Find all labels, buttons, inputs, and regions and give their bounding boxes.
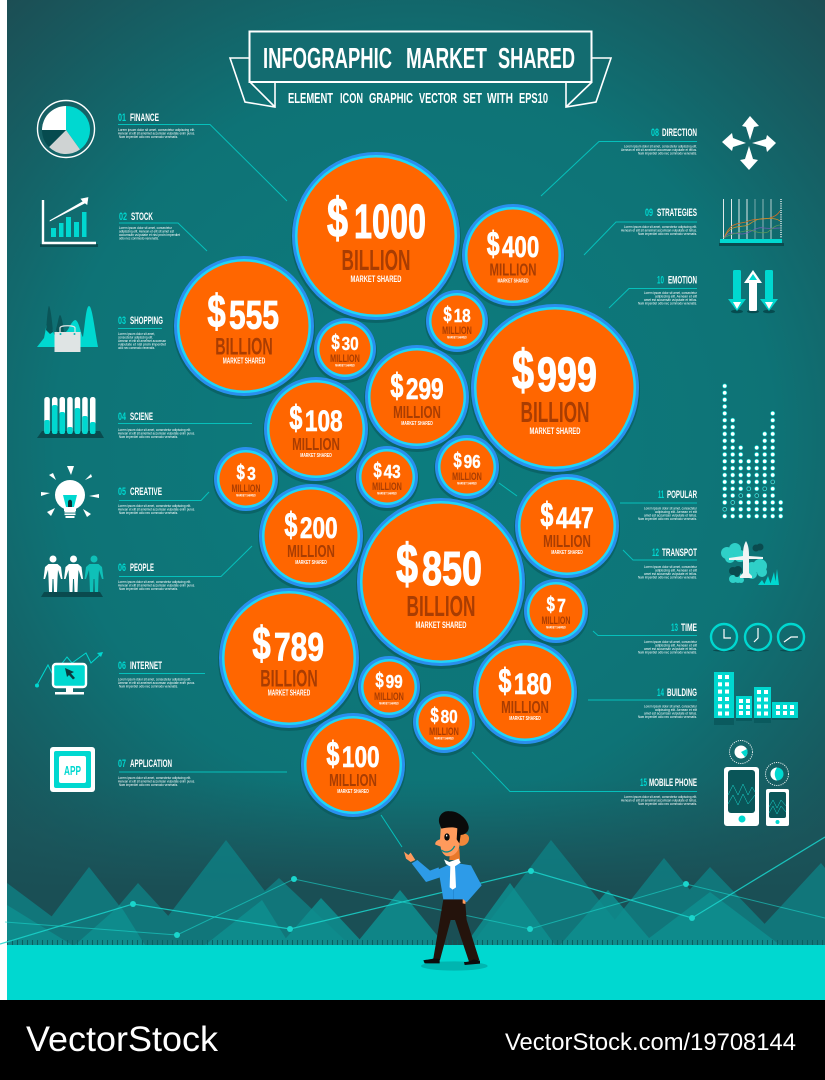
- label: 06 internet: INTERNET: [130, 660, 162, 672]
- label: 11 popular: 11: [658, 489, 664, 501]
- bubble: $99 million: $: [375, 668, 384, 692]
- label: 02 stock: adipiscing elit. Aenean et elit sit amet est: [119, 230, 174, 234]
- label: 05 creative: CREATIVE: [130, 486, 162, 498]
- footer bar: [0, 1000, 825, 1080]
- bubble: $80 million: MILLION: [429, 726, 459, 738]
- label: 15 mobile phone: Nam imperdiet odio nec commodo venenatis.: [638, 802, 697, 806]
- bubble: $108 million: $: [289, 400, 302, 438]
- label: 12 transpot: amet est accumsan vulputate et tellus.: [644, 572, 697, 576]
- icon: direction arrows: [722, 116, 776, 170]
- bubble: $789 billion: 789: [274, 625, 324, 669]
- label: 06 internet: Aenean et elit sit ameimet accumsan vulputate enim purus.: [118, 681, 195, 685]
- bubble: $80 million: $: [430, 703, 439, 727]
- label: 15 mobile phone: MOBILE PHONE: [649, 777, 697, 789]
- bubble: $30 million: 30: [342, 333, 359, 354]
- label: 07 application: APPLICATION: [130, 758, 172, 770]
- label: 09 strategies: [621, 207, 697, 236]
- label: 06 people: [118, 562, 195, 591]
- bubble: $299 million: 299: [406, 373, 444, 406]
- label: 11 popular: amet est accumsan vulputate et tellus.: [644, 514, 697, 518]
- label: 01 finance: Lorem ipsum dolor sit amet, consectetur adipiscing elit.: [118, 128, 195, 132]
- bubble: $30 million: [313, 318, 377, 383]
- bubble: $447 million: 447: [556, 502, 594, 535]
- bubble: $100 million: MARKET SHARED: [337, 789, 369, 795]
- label: 14 building: amet est accumsan vulputate et tellus.: [644, 712, 697, 716]
- label: 02 stock: 02: [119, 211, 127, 223]
- bubble: $555 billion: [173, 256, 315, 399]
- bubble: $99 million: MILLION: [374, 691, 404, 703]
- label: 06 people: PEOPLE: [130, 562, 154, 574]
- title: MARKET: [406, 43, 487, 75]
- icon: finance pie: [38, 100, 94, 158]
- bubble: $18 million: MARKET SHARED: [447, 335, 467, 339]
- bubble: $850 billion: [356, 498, 526, 669]
- label: 10 emotion: Lorem ipsum dolor sit amet, consectetur: [644, 291, 698, 295]
- label: 12 transpot: TRANSPOT: [662, 547, 697, 559]
- bubble: $400 million: [461, 204, 565, 309]
- label: 13 time: Nam imperdiet odio nec commodo venenatis.: [638, 650, 697, 654]
- footer url: VectorStock.com/19708144: [505, 1029, 796, 1056]
- label: 11 popular: POPULAR: [667, 489, 697, 501]
- trend line two: [5, 876, 825, 938]
- label: 05 creative: [118, 486, 195, 515]
- lower dark band: [7, 780, 825, 945]
- bubble: $1000 billion: BILLION: [342, 245, 410, 277]
- bubble: $299 million: [364, 345, 470, 452]
- label: 06 people: Lorem ipsum dolor sit amet, consectetur adipiscing elit.: [118, 580, 191, 584]
- bubble: $789 billion: MARKET SHARED: [268, 688, 310, 697]
- label: 13 time: TIME: [681, 622, 697, 634]
- subtitle: ICON: [340, 90, 363, 107]
- bubble: $7 million: 7: [557, 595, 566, 616]
- bubble: $789 billion: BILLION: [260, 665, 318, 692]
- bubble: $3 million: [213, 447, 279, 514]
- bubble: $555 billion: $: [207, 285, 226, 337]
- bubble: $96 million: MILLION: [452, 471, 482, 483]
- label: 04 sciene: Lorem ipsum dolor sit amet, consectetur adipiscing elit.: [118, 428, 191, 432]
- bubble: $850 billion: 850: [422, 543, 482, 596]
- bubble: $789 billion: [218, 588, 360, 731]
- bubble: $180 million: MARKET SHARED: [509, 716, 541, 722]
- label: 07 application: Aenean et elit sit ameimet accumsan vulputate enim purus.: [118, 780, 195, 784]
- label: 01 finance: Aenean et elit sit ameimet accumsan vulputate enim purus.: [118, 132, 195, 136]
- bubble: $99 million: 99: [386, 671, 403, 692]
- ground: [7, 945, 825, 1000]
- label: 10 emotion: adipiscing elit. Aenean et elit: [655, 294, 697, 298]
- bubble: $18 million: $: [443, 302, 452, 326]
- bubble: $30 million: MILLION: [330, 353, 360, 365]
- label: 07 application: Nam imperdiet odio nec commodo venenatis.: [119, 783, 178, 787]
- bubble: $999 billion: [470, 304, 640, 475]
- bubble: $999 billion: $: [512, 338, 534, 401]
- bubble: $999 billion: 999: [537, 349, 597, 402]
- icon: app: [50, 747, 95, 792]
- label: 10 emotion: EMOTION: [668, 274, 697, 286]
- trend line one: [0, 837, 825, 944]
- label: 10 emotion: Nam imperdiet odio nec commodo venenatis.: [638, 302, 697, 306]
- label: 05 creative: Aenean et elit sit ameimet accumsan vulputate enim purus.: [118, 508, 195, 512]
- label: 11 popular: Nam imperdiet odio nec commodo venenatis.: [638, 517, 697, 521]
- connector lines to bubbles: [118, 124, 697, 847]
- bubble: $1000 billion: [291, 152, 461, 323]
- label: 03 shopping: SHOPPING: [130, 315, 163, 327]
- label: 02 stock: [119, 211, 180, 240]
- label: 03 shopping: Aenean et elit sit ameimet accumsan: [118, 339, 166, 343]
- bubble: $108 million: MARKET SHARED: [300, 453, 332, 459]
- bubble: $80 million: 80: [441, 706, 458, 727]
- icon: emotion arrows: [728, 270, 778, 313]
- bubble: $999 billion: MARKET SHARED: [530, 426, 581, 437]
- bubble: $400 million: 400: [502, 231, 539, 264]
- bubble: $850 billion: $: [396, 532, 418, 595]
- icon: clocks: [711, 624, 804, 652]
- label: 03 shopping: vulputate et nisl proin imperdiet: [118, 342, 166, 346]
- icon: app: APP: [64, 763, 81, 778]
- label: 15 mobile phone: Aenean et elit sit ameimet accumsan vulputate et tellus.: [621, 798, 697, 802]
- label: 07 application: Lorem ipsum dolor sit amet, consectetur adipiscing elit.: [118, 776, 191, 780]
- bubble: $555 billion: 555: [229, 293, 279, 337]
- bubble: $400 million: $: [487, 226, 500, 264]
- bubble: $850 billion: MARKET SHARED: [416, 620, 467, 631]
- icon: shopping: [37, 306, 98, 352]
- bubble: $180 million: [472, 640, 578, 747]
- label: 08 direction: Lorem ipsum dolor sit amet, consectetur adipiscing elit.: [624, 144, 697, 148]
- subtitle: VECTOR: [419, 90, 457, 107]
- label: 14 building: 14: [657, 687, 664, 699]
- bubble: $100 million: [300, 713, 406, 820]
- label: 10 emotion: amet est accumsan vulputate et tellus.: [644, 298, 697, 302]
- icon: stock chart: [40, 198, 98, 247]
- subtitle: SET: [463, 90, 482, 107]
- label: 10 emotion: 10: [657, 274, 664, 286]
- label: 06 people: Aenean et elit sit ameimet accumsan vulputate enim purus.: [118, 584, 195, 588]
- label: 04 sciene: 04: [118, 411, 127, 423]
- bubble: $999 billion: BILLION: [520, 397, 590, 429]
- bubble: $200 million: [258, 484, 364, 591]
- label: 11 popular: Lorem ipsum dolor sit amet, consectetur: [644, 506, 698, 510]
- mountains: [7, 840, 825, 945]
- icon: popular dot chart: [723, 386, 781, 517]
- bubble: $100 million: 100: [342, 741, 380, 774]
- label: 14 building: Lorem ipsum dolor sit amet, consectetur: [644, 704, 698, 708]
- title: INFOGRAPHIC: [263, 43, 392, 75]
- icon: buildings: [714, 672, 798, 725]
- bubble: $96 million: [434, 435, 500, 502]
- subtitle: EPS10: [519, 90, 548, 107]
- bubble: $200 million: MILLION: [287, 541, 335, 561]
- label: 09 strategies: Aenean et elit sit ameimet accumsan vulputate et tellus.: [621, 228, 697, 232]
- icon: light bulb: [41, 466, 99, 518]
- label: 12 transpot: 12: [652, 547, 659, 559]
- label: 06 internet: [118, 660, 195, 688]
- label: 13 time: amet est accumsan vulputate et tellus.: [644, 647, 697, 651]
- label: 07 application: [118, 758, 195, 787]
- bubble: $96 million: MARKET SHARED: [457, 481, 477, 485]
- label: 03 shopping: consectetur adipiscing elit.: [118, 336, 153, 340]
- label: 13 time: Lorem ipsum dolor sit amet, consectetur: [644, 640, 698, 644]
- bubble: $18 million: 18: [454, 305, 471, 326]
- label: 15 mobile phone: 15: [640, 777, 647, 789]
- label: 08 direction: 08: [651, 127, 659, 139]
- bubble: $555 billion: BILLION: [215, 333, 273, 360]
- label: 12 transpot: [638, 547, 698, 580]
- title: SHARED: [498, 43, 575, 75]
- bubble: $43 million: [355, 446, 419, 511]
- label: 13 time: adipiscing elit. Aenean et elit: [655, 644, 697, 648]
- subtitle: WITH: [487, 90, 513, 107]
- icon: mobile phones: [724, 740, 789, 826]
- bubble: $180 million: 180: [514, 668, 552, 701]
- label: 09 strategies: Nam imperdiet odio nec commodo venenatis.: [638, 232, 697, 236]
- label: 09 strategies: Lorem ipsum dolor sit amet, consectetur adipiscing elit.: [624, 225, 697, 229]
- label: 06 people: 06: [118, 562, 126, 574]
- businessman character: [404, 811, 488, 971]
- bubble: $30 million: $: [331, 330, 340, 354]
- label: 01 finance: Nam imperdiet odio nec commodo venenatis.: [119, 135, 178, 139]
- label: 07 application: 07: [118, 758, 126, 770]
- title: [263, 43, 575, 75]
- bubble: $18 million: MILLION: [442, 325, 472, 337]
- bubble: $180 million: MILLION: [501, 697, 549, 717]
- bubble: $3 million: MARKET SHARED: [236, 493, 256, 497]
- label: 14 building: BUILDING: [667, 687, 697, 699]
- bubble: $80 million: [412, 691, 476, 756]
- bubble: $43 million: 43: [384, 461, 401, 482]
- bubble: $3 million: MILLION: [232, 483, 260, 495]
- label: 15 mobile phone: Lorem ipsum dolor sit amet, consectetur adipiscing elit.: [624, 795, 697, 799]
- label: 05 creative: Nam imperdiet odio nec commodo venenatis.: [119, 511, 178, 515]
- label: 01 finance: [118, 112, 195, 139]
- label: 11 popular: [638, 489, 698, 521]
- bubble: $299 million: MILLION: [393, 402, 441, 422]
- subtitle: GRAPHIC: [369, 90, 413, 107]
- bubble: $3 million: $: [236, 460, 245, 484]
- label: 02 stock: Lorem ipsum dolor sit amet, consectetur: [119, 226, 173, 230]
- label: 06 internet: Lorem ipsum dolor sit amet, consectetur adipiscing elit.: [118, 678, 191, 682]
- label: 03 shopping: Lorem ipsum dolor sit amet,: [118, 332, 155, 336]
- label: 05 creative: 05: [118, 486, 126, 498]
- bubble: $299 million: MARKET SHARED: [401, 421, 433, 427]
- label: 06 people: Nam imperdiet odio nec commodo venenatis.: [119, 587, 178, 591]
- label: 06 internet: Nam imperdiet odio nec commodo venenatis.: [119, 684, 178, 688]
- label: 03 shopping: [118, 315, 166, 350]
- label: 04 sciene: [118, 411, 195, 439]
- label: 13 time: [638, 622, 698, 654]
- bubble: $43 million: $: [373, 458, 382, 482]
- label: 14 building: Nam imperdiet odio nec commodo venenatis.: [638, 715, 697, 719]
- label: 13 time: 13: [671, 622, 678, 634]
- label: 14 building: [638, 687, 698, 719]
- label: 01 finance: 01: [118, 112, 126, 124]
- label: 05 creative: Lorem ipsum dolor sit amet, consectetur adipiscing elit.: [118, 504, 191, 508]
- label: 08 direction: Aenean et elit sit ameimet accumsan vulputate et tellus.: [621, 148, 697, 152]
- bubble: $400 million: MARKET SHARED: [497, 278, 529, 284]
- label: 04 sciene: Nam imperdiet odio nec commodo venenatis.: [119, 435, 178, 439]
- bubble: $43 million: MARKET SHARED: [377, 491, 397, 495]
- label: 02 stock: accumsan vulputate et nisl proin imperdiet: [119, 233, 180, 237]
- label: 06 internet: 06: [118, 660, 126, 672]
- bubble: $99 million: MARKET SHARED: [379, 701, 399, 705]
- label: 02 stock: odio nec commodo venenatis.: [119, 236, 159, 240]
- bubble: $400 million: MILLION: [490, 260, 536, 280]
- label: 11 popular: adipiscing elit. Aenean et elit: [655, 510, 697, 514]
- icon: internet monitor: [35, 652, 103, 694]
- bubble: $447 million: MARKET SHARED: [551, 550, 583, 556]
- title banner: [230, 32, 611, 107]
- bubble: $789 billion: $: [252, 617, 271, 669]
- bubble: $108 million: 108: [305, 405, 343, 438]
- bubble: $108 million: [263, 377, 369, 484]
- bubble: $1000 billion: MARKET SHARED: [350, 274, 402, 285]
- bubble: $7 million: MILLION: [542, 615, 570, 627]
- bubble: $1000 billion: 1000: [354, 196, 426, 249]
- bubble: $7 million: MARKET SHARED: [546, 625, 566, 629]
- bubble: $299 million: $: [390, 368, 403, 406]
- bubble: $200 million: $: [284, 507, 297, 545]
- label: 15 mobile phone: [621, 777, 697, 806]
- label: 03 shopping: odio nec commodo venenatis.: [118, 346, 155, 350]
- label: 08 direction: [621, 127, 697, 156]
- bubble: $447 million: $: [540, 497, 553, 535]
- bubble: $80 million: MARKET SHARED: [434, 736, 454, 740]
- bubble: $3 million: 3: [247, 463, 256, 484]
- label: 09 strategies: 09: [645, 207, 653, 219]
- subtitle: ELEMENT: [288, 90, 333, 107]
- bubble: $447 million: [514, 474, 620, 581]
- bubble: $7 million: $: [546, 592, 555, 616]
- bubble: $99 million: [357, 656, 421, 721]
- label: 03 shopping: 03: [118, 315, 126, 327]
- bubble: $96 million: $: [453, 448, 462, 472]
- bubble: $200 million: MARKET SHARED: [295, 560, 327, 566]
- icon: transport plane: [721, 541, 779, 585]
- label: 02 stock: STOCK: [131, 211, 153, 223]
- label: 12 transpot: Lorem ipsum dolor sit amet, consectetur: [644, 565, 698, 569]
- footer brand: VectorStock: [26, 1020, 219, 1059]
- label: 04 sciene: SCIENE: [130, 411, 153, 423]
- bubble: $447 million: MILLION: [543, 531, 591, 551]
- bubble: $1000 billion: $: [327, 186, 348, 249]
- bubble: $850 billion: BILLION: [406, 591, 476, 623]
- label: 09 strategies: STRATEGIES: [657, 207, 697, 219]
- label: 14 building: adipiscing elit. Aenean et elit: [655, 708, 697, 712]
- icon: people: [41, 556, 104, 597]
- bubble: $43 million: MILLION: [372, 481, 402, 493]
- label: 01 finance: FINANCE: [130, 112, 159, 124]
- subtitle: [288, 90, 548, 107]
- label: 08 direction: Nam imperdiet odio nec commodo venenatis.: [638, 152, 697, 156]
- label: 12 transpot: Nam imperdiet odio nec commodo venenatis.: [638, 576, 697, 580]
- label: 08 direction: DIRECTION: [662, 127, 697, 139]
- bubble: $7 million: [523, 579, 589, 646]
- bubble: $180 million: $: [498, 663, 511, 701]
- label: 12 transpot: adipiscing elit. Aenean et elit: [655, 568, 697, 572]
- icon: strategies chart: [719, 199, 784, 246]
- bubble: $555 billion: MARKET SHARED: [223, 356, 265, 365]
- bubble: $200 million: 200: [300, 512, 338, 545]
- bubble: $100 million: MILLION: [329, 770, 377, 790]
- bubble: $18 million: [425, 290, 489, 355]
- icon: science tubes: [37, 397, 104, 438]
- label: 10 emotion: [638, 274, 698, 306]
- label: 04 sciene: Aenean et elit sit ameimet accumsan vulputate enim purus.: [118, 432, 195, 436]
- bubble: $30 million: MARKET SHARED: [335, 363, 355, 367]
- bubble: $108 million: MILLION: [292, 434, 340, 454]
- bubble: $96 million: 96: [464, 451, 481, 472]
- bubble: $100 million: $: [326, 736, 339, 774]
